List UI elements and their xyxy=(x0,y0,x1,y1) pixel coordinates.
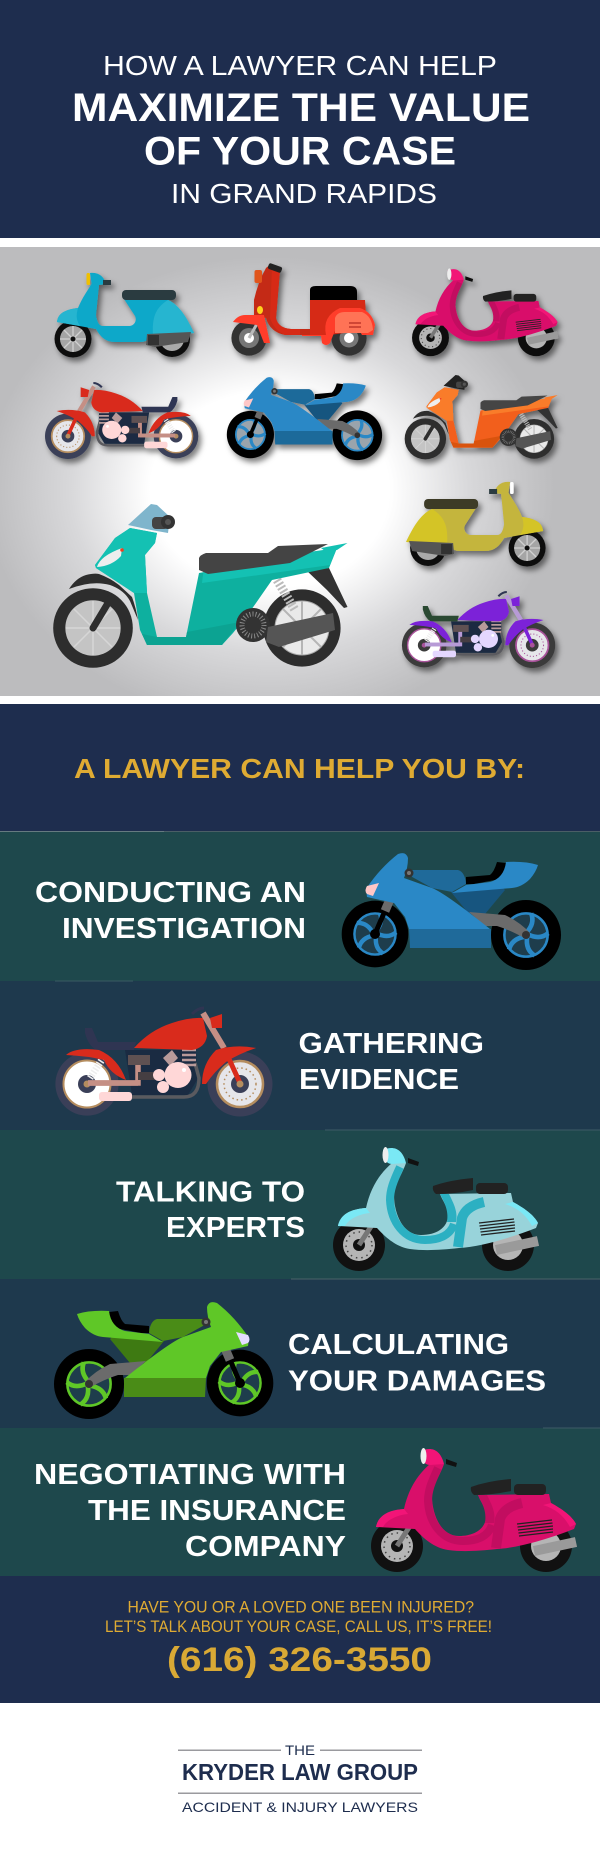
logo: the kryder law group: ACCIDENT & INJURY LAWYERS xyxy=(182,1799,418,1815)
text: gathering evidence xyxy=(298,1028,484,1096)
title: in grand rapids: IN GRAND RAPIDS xyxy=(171,178,437,209)
heading: a lawyer can help you by: A LAWYER CAN HELP YOU BY: xyxy=(74,753,525,784)
text: conducting an investigation: CONDUCTING AN xyxy=(35,877,306,909)
text: let's talk about your case: LET’S TALK ABOUT YOUR CASE, CALL US, IT’S FREE! xyxy=(105,1618,492,1636)
icon: purple cruiser motorcycle xyxy=(402,592,555,668)
text: negotiating with the insurance company: THE INSURANCE xyxy=(88,1495,346,1527)
phone number: (616) 326-3550 xyxy=(167,1641,432,1679)
panel: talking to experts xyxy=(0,1130,600,1279)
title: maximize the value: MAXIMIZE THE VALUE xyxy=(72,86,530,130)
text: gathering evidence: EVIDENCE xyxy=(299,1064,459,1096)
title: how a lawyer can help: HOW A LAWYER CAN HELP xyxy=(103,50,497,81)
panel: calculating your damages xyxy=(0,1278,600,1428)
icon: green sport motorcycle xyxy=(54,1302,273,1419)
logo: the kryder law group: KRYDER LAW GROUP xyxy=(182,1759,418,1785)
icon: yellow vespa scooter xyxy=(406,482,546,566)
panel: negotiating with the insurance company xyxy=(0,1428,600,1576)
icon: orange scooter xyxy=(405,375,558,459)
text: talking to experts xyxy=(116,1176,305,1244)
icon: red scooter xyxy=(231,263,375,356)
icon: blue sport motorcycle xyxy=(342,853,561,970)
title: of your case: OF YOUR CASE xyxy=(144,130,456,174)
icon: teal scooter xyxy=(53,504,347,668)
icon: blue vespa scooter xyxy=(54,273,194,358)
logo: the kryder law group: THE xyxy=(285,1742,315,1758)
text: calculating your damages: CALCULATING xyxy=(288,1329,509,1361)
panel: gathering evidence xyxy=(0,980,600,1130)
text: conducting an investigation xyxy=(35,877,306,945)
text: calculating your damages: YOUR DAMAGES xyxy=(288,1366,546,1398)
text: calculating your damages xyxy=(288,1329,546,1398)
text: have you or a loved one been injured: HAVE YOU OR A LOVED ONE BEEN INJURED? xyxy=(128,1598,474,1616)
icon: pink scooter xyxy=(412,268,558,356)
text: negotiating with the insurance company xyxy=(34,1459,346,1563)
panel: a lawyer can help you by xyxy=(0,704,600,832)
icon: pink scooter xyxy=(371,1448,576,1572)
text: conducting an investigation: INVESTIGATION xyxy=(62,913,306,945)
logo: the kryder law group xyxy=(178,1742,422,1815)
header panel xyxy=(0,0,600,238)
text: gathering evidence: GATHERING xyxy=(298,1028,484,1060)
text: negotiating with the insurance company: COMPANY xyxy=(185,1531,346,1563)
text: talking to experts: EXPERTS xyxy=(166,1212,305,1244)
panel: motorcycle collage xyxy=(0,247,600,696)
icon: red cruiser motorcycle xyxy=(55,1008,273,1116)
icon: red cruiser motorcycle xyxy=(45,383,198,459)
panel: conducting an investigation xyxy=(0,831,600,981)
icon: blue sport motorcycle xyxy=(227,377,382,460)
text: negotiating with the insurance company: NEGOTIATING WITH xyxy=(34,1459,346,1491)
text: talking to experts: TALKING TO xyxy=(116,1176,305,1208)
icon: light blue scooter xyxy=(333,1147,538,1271)
panel: call to action xyxy=(0,1576,600,1703)
